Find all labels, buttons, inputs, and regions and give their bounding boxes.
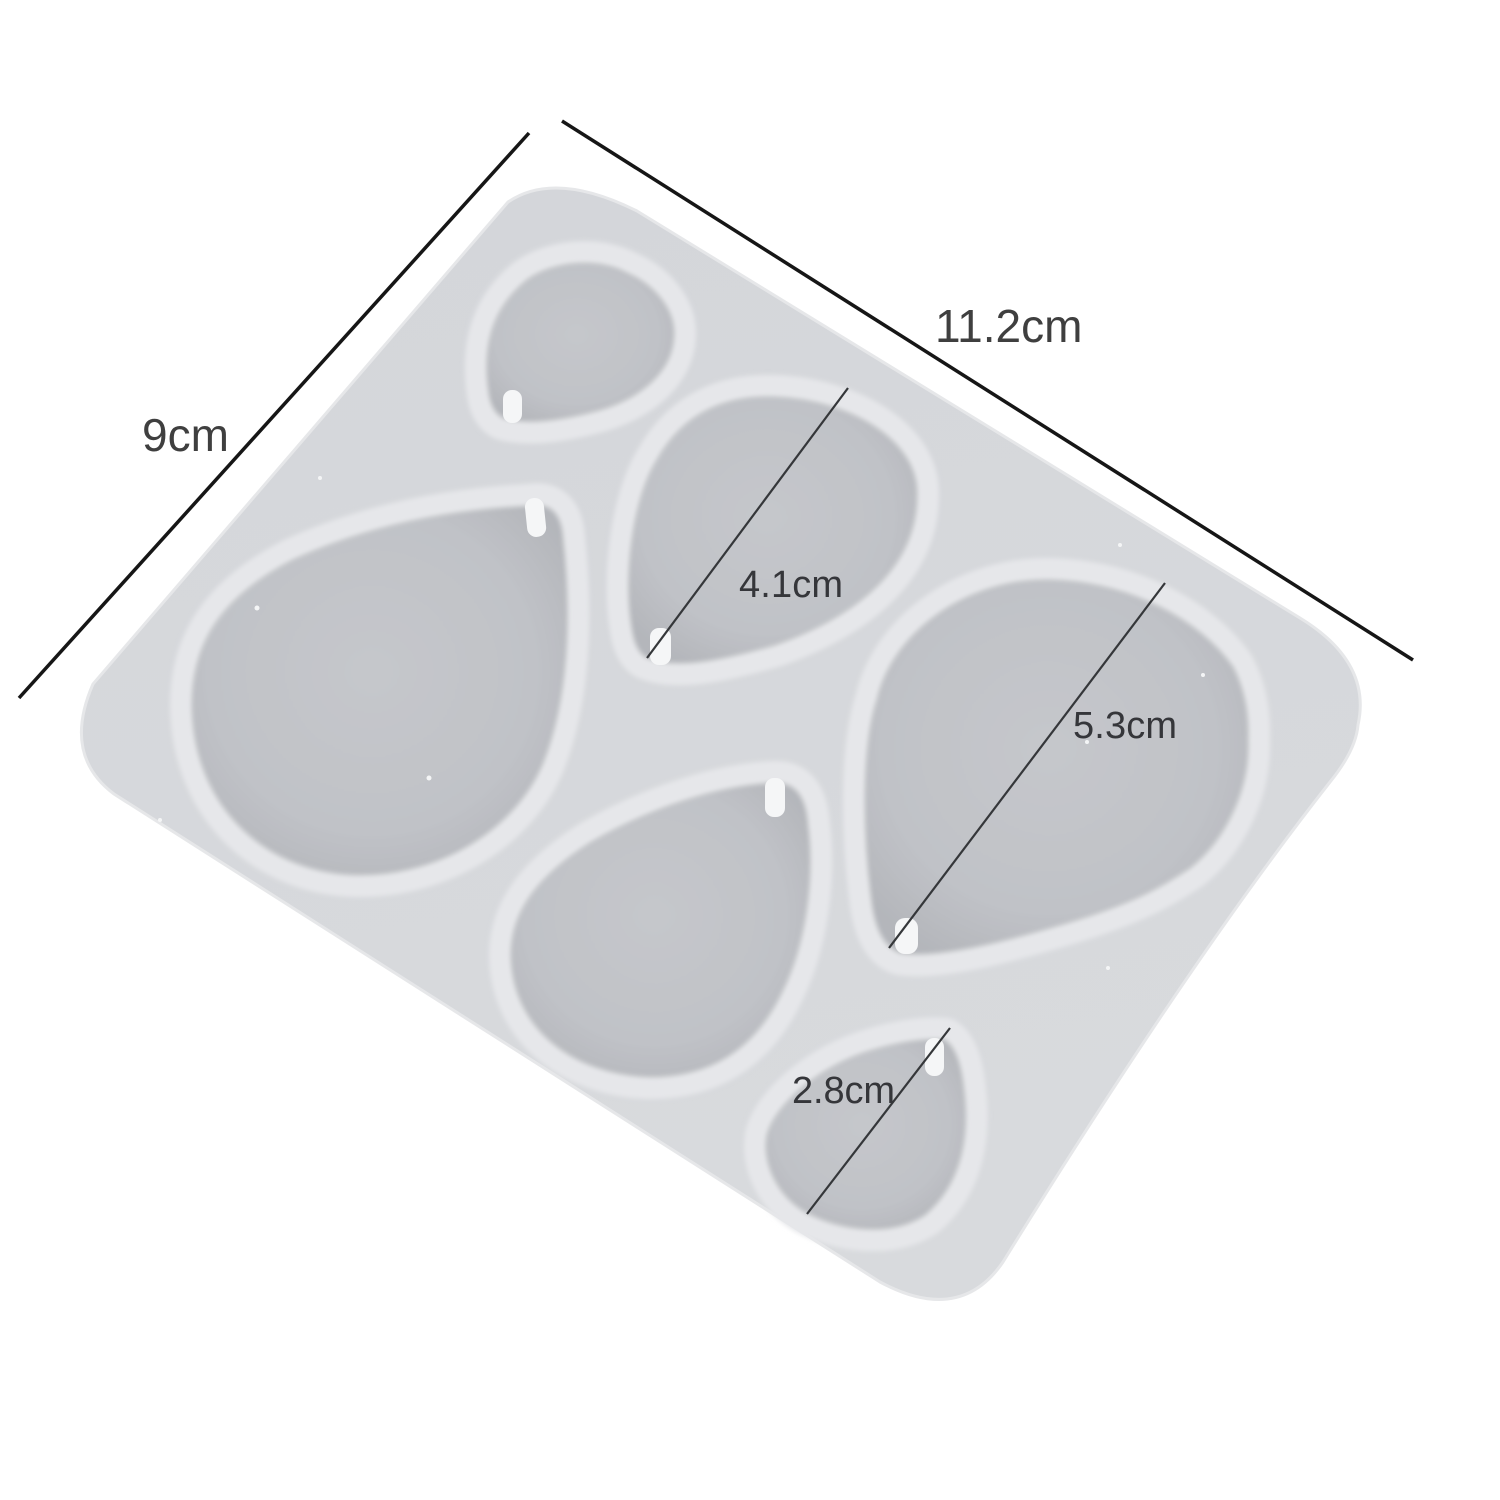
dimension line: 2.8cm: 2.8cm (792, 1070, 895, 1112)
dimension line: 2.8cm (792, 1028, 950, 1214)
dimension line: 9cm: 9cm (142, 409, 229, 461)
cavity: large teardrop right (865, 580, 1248, 954)
dimension line: 11.2cm (562, 121, 1413, 660)
dimension line: 4.1cm (647, 388, 848, 658)
cavity: small teardrop bottom (766, 1038, 966, 1229)
cavity: medium teardrop bottom centre (511, 778, 810, 1077)
cavity: small teardrop top (487, 263, 674, 423)
dimension line: 5.3cm: 5.3cm (1073, 705, 1177, 747)
dimension line: 9cm (19, 133, 529, 698)
mold body (81, 188, 1360, 1299)
cavity: large teardrop left (192, 497, 567, 875)
sparkle flecks on silicone (158, 476, 1205, 970)
dimension line: 11.2cm: 11.2cm (935, 300, 1082, 352)
dimension line: 5.3cm (889, 583, 1177, 948)
dimension line: 4.1cm: 4.1cm (739, 564, 843, 606)
cavity: medium teardrop top centre (629, 397, 917, 665)
